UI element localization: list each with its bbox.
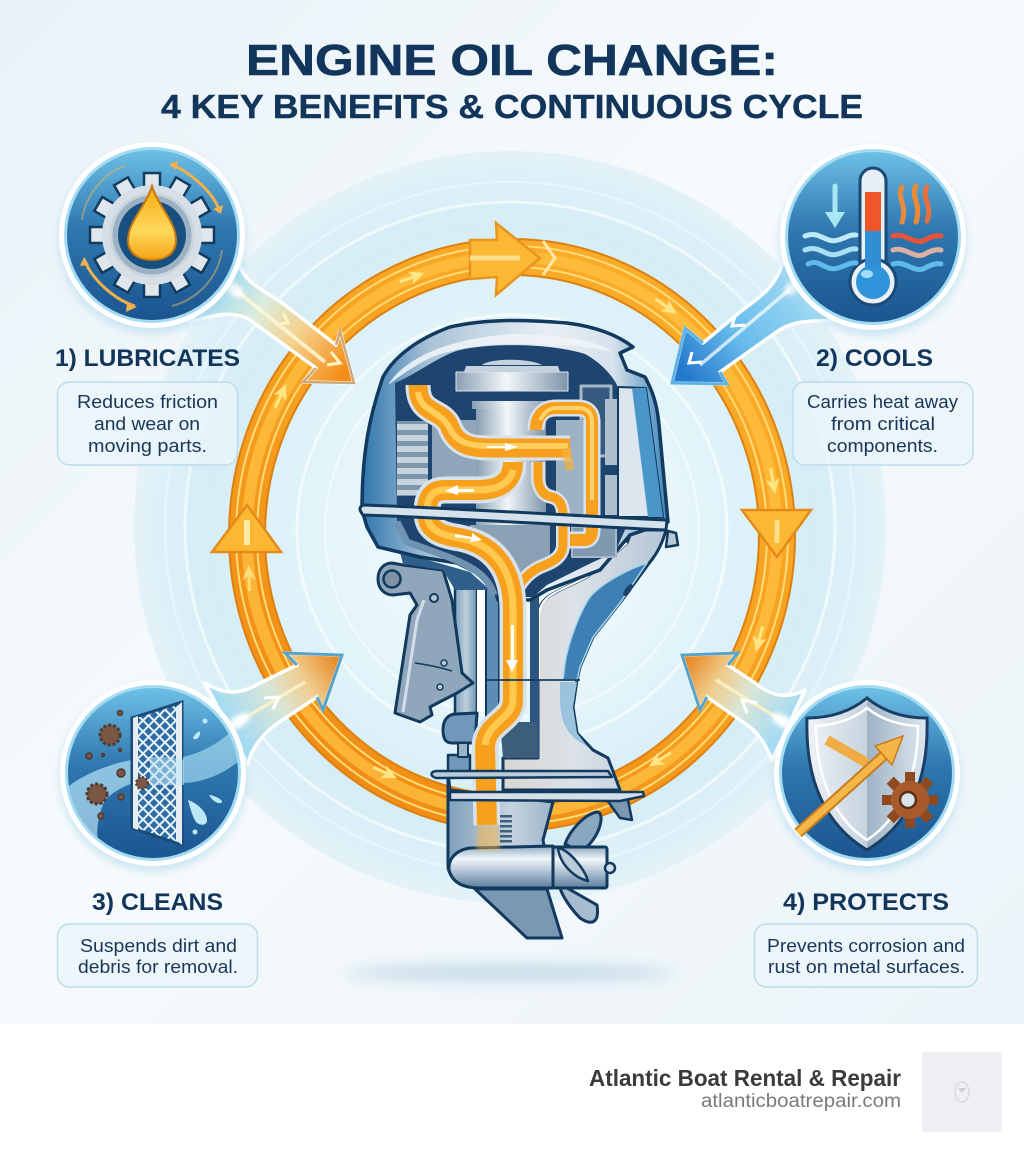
cowl band: [360, 505, 667, 530]
strut: [455, 585, 477, 717]
title: [161, 36, 863, 125]
text box: protects: rust on metal surfaces.: [768, 957, 965, 977]
continuous oil cycle ring: [212, 223, 811, 824]
label: cools: 2) COOLS: [816, 345, 933, 372]
flange: [456, 372, 568, 391]
callout arrow: cleans: [205, 653, 342, 765]
cold waves and arrow: [805, 186, 856, 269]
lower strut: [448, 755, 470, 772]
text box: cools: components.: [827, 436, 938, 456]
white gap: [477, 588, 486, 712]
body white edge: [539, 543, 627, 680]
passage: right loop: [536, 408, 592, 540]
anti-ventilation plate: [450, 792, 644, 801]
label: cleans: 3) CLEANS: [92, 889, 223, 916]
upper bracket shadow: [400, 552, 490, 590]
text box: protects: [754, 924, 978, 987]
cavitation plate upper: [432, 771, 612, 778]
icon: lubricates gear and oil drop: [58, 142, 246, 334]
text box: cleans: [58, 924, 258, 987]
lower cowl inner band: [397, 522, 494, 595]
cooling fins: [397, 421, 428, 496]
footer brand text: Atlantic Boat Rental & Repair: [589, 1065, 901, 1091]
callout arrow: lubricates: [190, 262, 354, 383]
drip: [566, 448, 570, 470]
footer brand text: atlanticboatrepair.com: [701, 1091, 901, 1112]
lower blue fade: [560, 682, 587, 746]
water flow: [69, 760, 130, 837]
footer logo placeholder: [922, 1052, 1002, 1132]
footer brand text: [589, 1065, 901, 1112]
rear dark notch: [622, 583, 634, 597]
small flow arrows: [242, 266, 782, 784]
passage: top: [418, 385, 570, 448]
icon: protects shield: [773, 680, 961, 872]
label: lubricates: [55, 345, 240, 465]
neck: [472, 401, 550, 409]
propeller hub: [553, 812, 615, 922]
debris: [86, 710, 148, 819]
thermometer: [850, 168, 896, 305]
text box: cools: Carries heat away: [807, 392, 958, 412]
label: protects: [754, 889, 978, 987]
callout arrow: cools: [672, 262, 835, 384]
shaft column: [486, 588, 499, 716]
right frames: [556, 386, 617, 557]
text box: cleans: debris for removal.: [78, 957, 238, 977]
gear teeth: [500, 815, 512, 842]
radial glow rings: [134, 151, 886, 903]
ground shadow: [345, 963, 675, 983]
top cowl highlight: [388, 334, 612, 385]
text box: lubricates: [58, 382, 238, 465]
lower dark panel: [500, 722, 537, 758]
cap: [464, 360, 560, 372]
shield inner rim: [816, 708, 918, 840]
outboard engine: [360, 320, 678, 938]
rear tab: [666, 531, 678, 547]
label: cleans: [58, 889, 258, 987]
gearcase: [448, 772, 553, 888]
text box: lubricates: Reduces friction: [77, 392, 218, 412]
oil pool fade: [476, 825, 500, 850]
cutaway cavity: [395, 345, 625, 597]
callout arrow: protects: [682, 653, 805, 760]
text box: cools: from critical: [831, 414, 935, 434]
transom bracket: [378, 563, 473, 722]
icon: cools thermometer: [779, 144, 967, 336]
label: cools: [793, 345, 973, 465]
dark column: [530, 590, 539, 758]
label: lubricates: 1) LUBRICATES: [55, 345, 240, 372]
rust-piercing arrow: [798, 736, 903, 833]
pipe flow arrows: [445, 443, 518, 672]
passage: small branch: [516, 462, 563, 592]
icon: cleans filter: [59, 680, 247, 872]
label: protects: 4) PROTECTS: [783, 889, 949, 916]
text box: cleans: Suspends dirt and: [80, 936, 237, 956]
midsection silver body: [503, 530, 666, 790]
torpedo: [449, 846, 553, 888]
left inner block: [432, 420, 476, 480]
arrowhead: right: [742, 510, 811, 557]
rusty gear: [882, 772, 938, 828]
shaft joint line: [487, 679, 580, 681]
hot waves and flames: [893, 186, 941, 270]
filter panel: [132, 702, 182, 845]
cowling: [362, 320, 668, 600]
oil passages: [418, 385, 592, 825]
right cowl panel: [618, 387, 663, 517]
shield: [807, 698, 927, 850]
passage: centre and main shaft: [427, 462, 513, 825]
clamp: [443, 713, 477, 743]
water droplets: [188, 718, 222, 834]
arrowhead: left: [212, 505, 281, 552]
fin under plate: [607, 800, 632, 820]
footer band: [0, 1024, 1024, 1154]
arrowhead: top: [470, 223, 555, 295]
text box: cools: [793, 382, 973, 465]
gear teeth: [90, 173, 214, 297]
title: ENGINE OIL CHANGE:: [246, 36, 778, 85]
cylinder: [476, 408, 546, 528]
blue contour strip: [563, 563, 647, 680]
skeg: [475, 889, 562, 938]
text box: lubricates: and wear on: [94, 414, 200, 434]
text box: protects: Prevents corrosion and: [767, 936, 965, 956]
title: 4 KEY BENEFITS & CONTINUOUS CYCLE: [161, 88, 863, 125]
text box: lubricates: moving parts.: [88, 436, 207, 456]
cylinder lower: [470, 525, 550, 585]
